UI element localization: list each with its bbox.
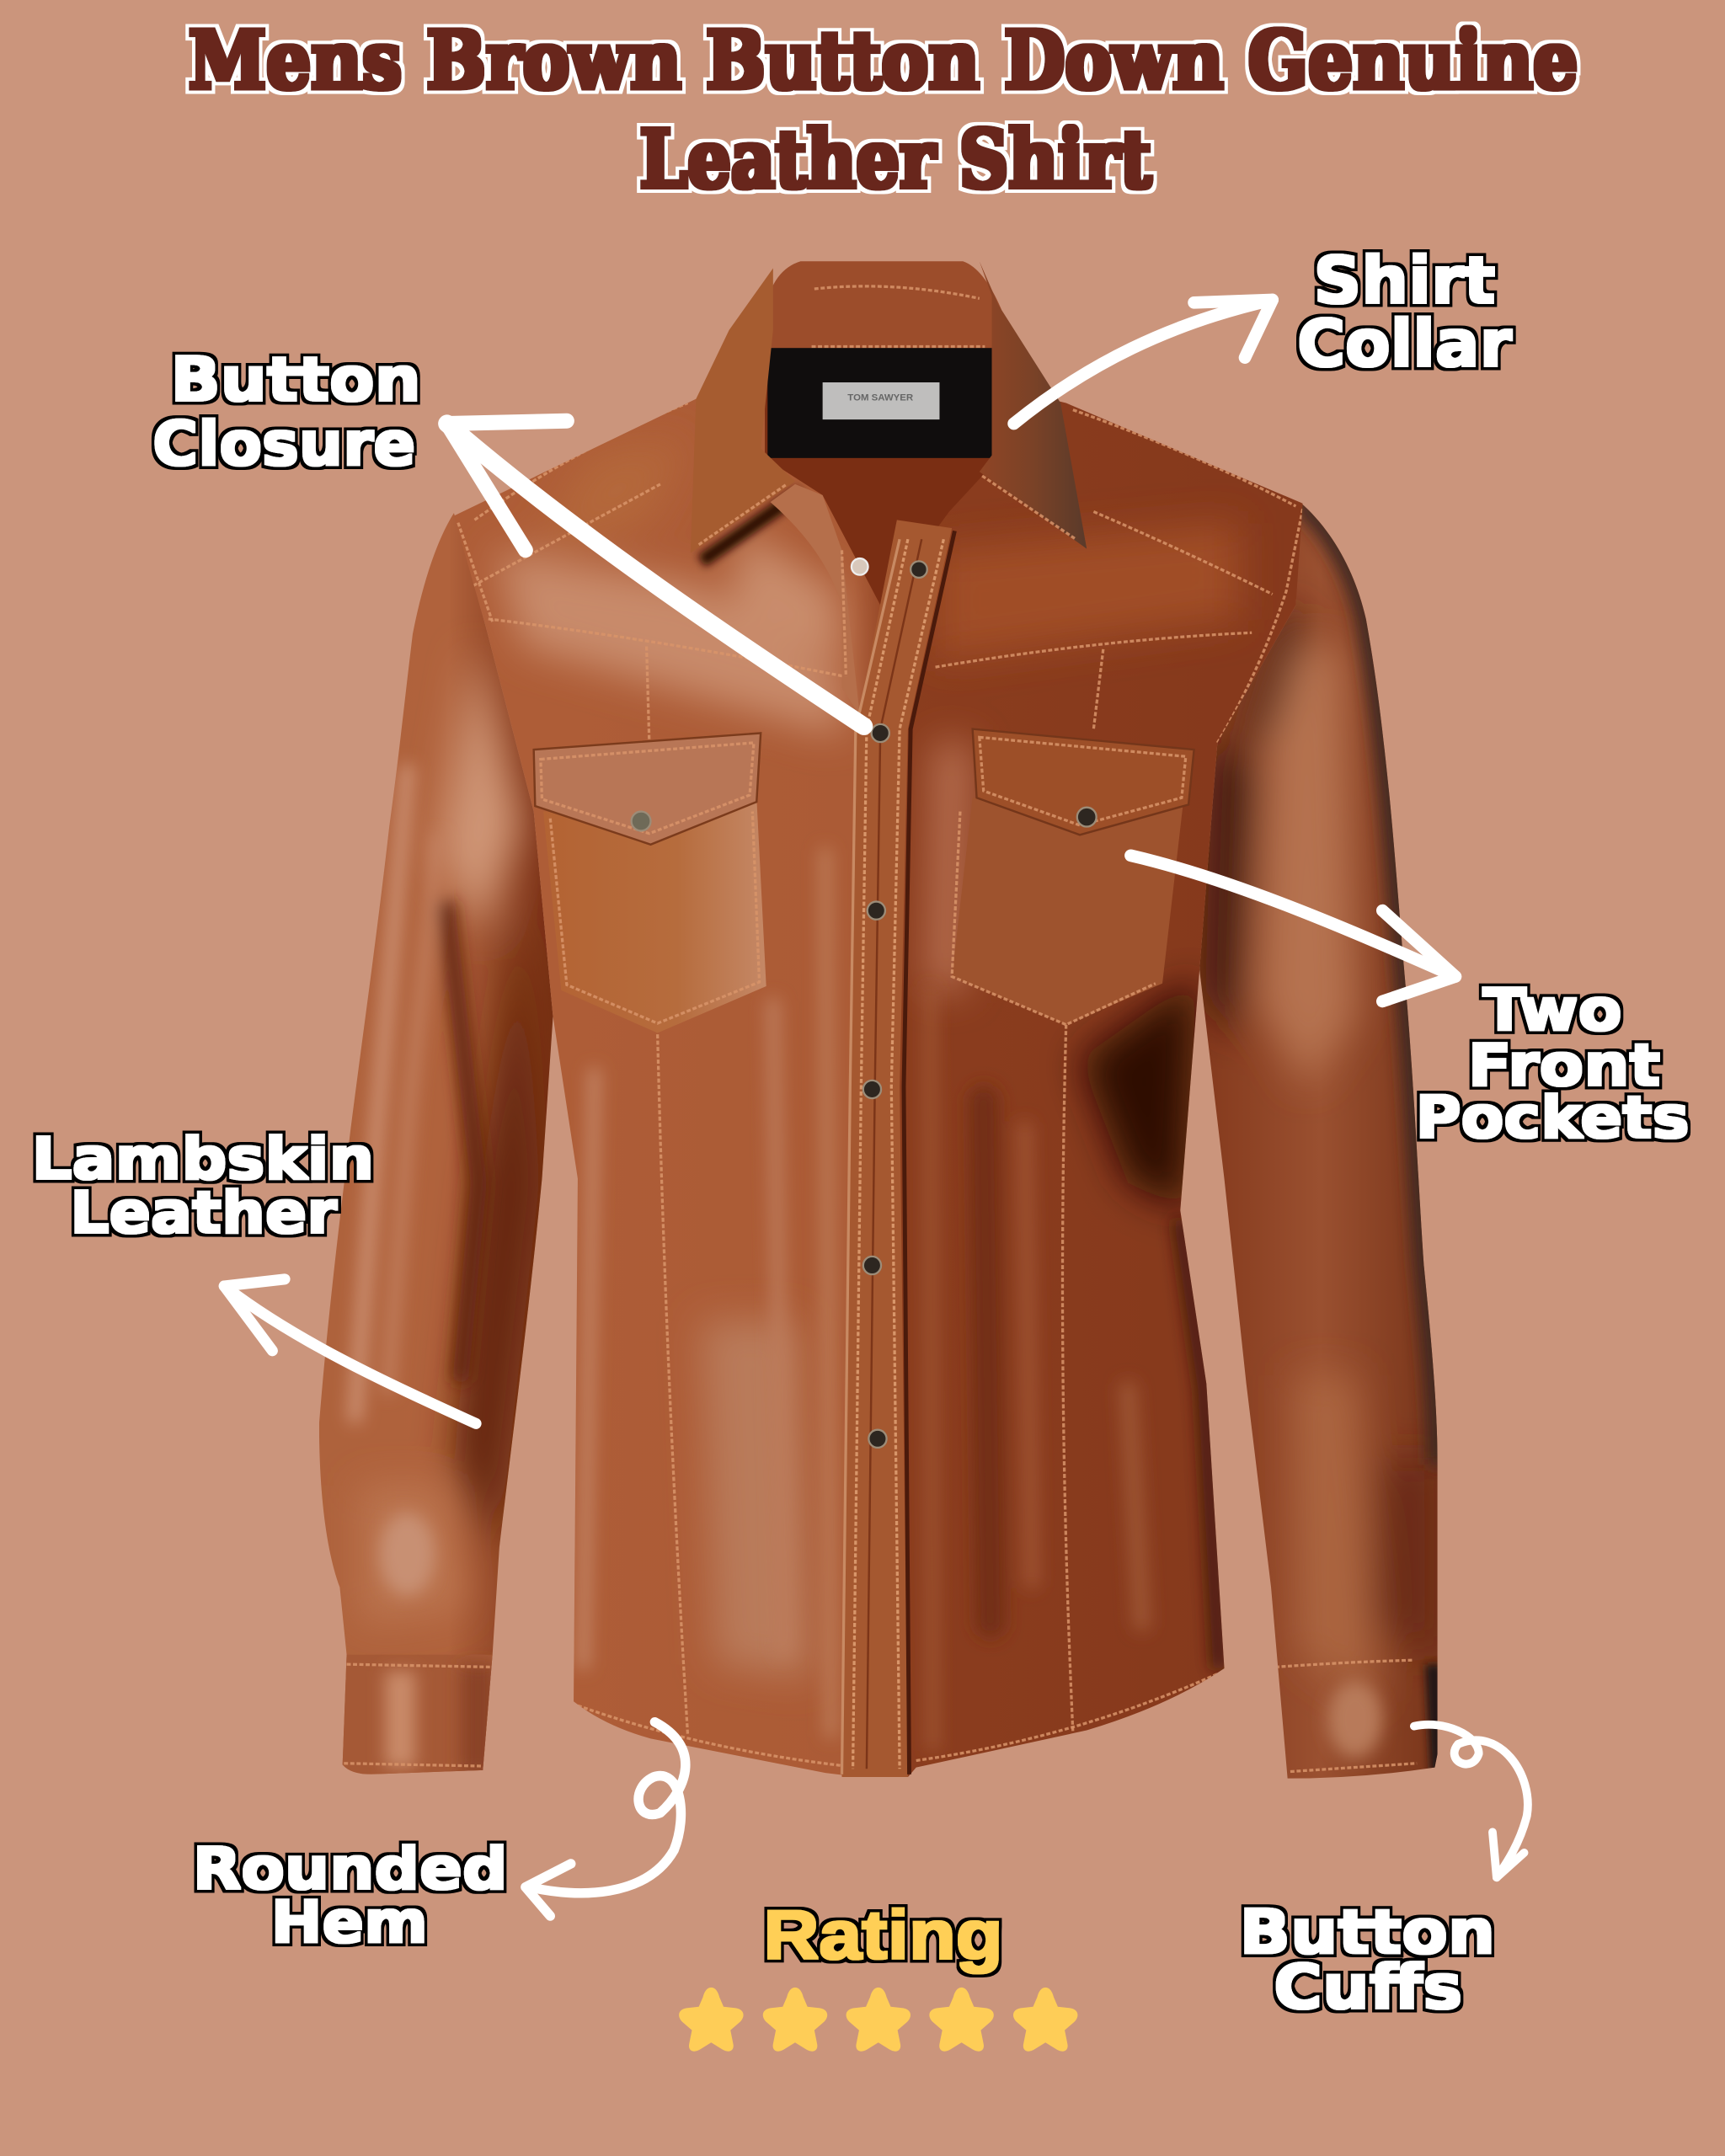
right sleeve xyxy=(1190,495,1445,1788)
label: shirt collar: Shirt xyxy=(1314,243,1495,318)
title: Leather Shirt xyxy=(639,113,1151,206)
label: two front pockets: Two xyxy=(1483,977,1622,1044)
leather shirt illustration xyxy=(302,261,1445,1788)
rating heading: Rating xyxy=(763,1897,1003,1974)
label: button cuffs xyxy=(1239,1897,1495,2022)
label: lambskin leather xyxy=(32,1126,374,1246)
label: shirt collar xyxy=(1297,243,1512,382)
label: lambskin leather: Leather xyxy=(70,1179,337,1246)
rating stars xyxy=(679,1988,1077,2052)
label: rounded hem: Rounded xyxy=(193,1835,508,1903)
left front collar stand xyxy=(771,484,860,715)
title xyxy=(189,14,1578,206)
label: button closure: Button xyxy=(171,344,421,414)
collar back xyxy=(765,261,1001,358)
arrow: button closure xyxy=(447,421,864,726)
label: shirt collar: Collar xyxy=(1297,307,1512,382)
label: button closure xyxy=(152,344,421,479)
label: rounded hem: Hem xyxy=(271,1889,428,1956)
arrow: shirt collar xyxy=(1014,300,1273,424)
arrow: button cuffs xyxy=(1414,1725,1528,1877)
label: button closure: Closure xyxy=(152,408,415,479)
left sleeve xyxy=(319,513,553,1774)
arrow: rounded hem xyxy=(526,1722,686,1916)
shirt body xyxy=(454,358,1307,1788)
label: button cuffs: Cuffs xyxy=(1274,1951,1462,2022)
label: two front pockets xyxy=(1416,977,1690,1152)
arrow: lambskin leather xyxy=(224,1279,476,1423)
right pocket xyxy=(952,729,1194,1025)
collar left leaf xyxy=(691,268,795,553)
neck label: TOM SAWYER xyxy=(847,392,914,403)
neck band black xyxy=(767,348,996,458)
snap buttons xyxy=(632,558,1097,1448)
title: Mens Brown Button Down Genuine xyxy=(189,14,1578,108)
arrow: two front pockets xyxy=(1130,856,1455,1001)
label: two front pockets: Pockets xyxy=(1416,1085,1690,1152)
collar right leaf xyxy=(980,261,1087,549)
label: lambskin leather: Lambskin xyxy=(32,1126,374,1193)
label: button cuffs: Button xyxy=(1239,1897,1495,1967)
stitching seams xyxy=(467,484,660,589)
collar shadow xyxy=(702,493,801,561)
placket xyxy=(842,520,952,1777)
left pocket xyxy=(534,733,766,1033)
label: rounded hem xyxy=(193,1835,508,1956)
label: two front pockets: Front xyxy=(1468,1033,1660,1100)
neck label xyxy=(823,382,939,419)
neck opening xyxy=(765,317,999,606)
